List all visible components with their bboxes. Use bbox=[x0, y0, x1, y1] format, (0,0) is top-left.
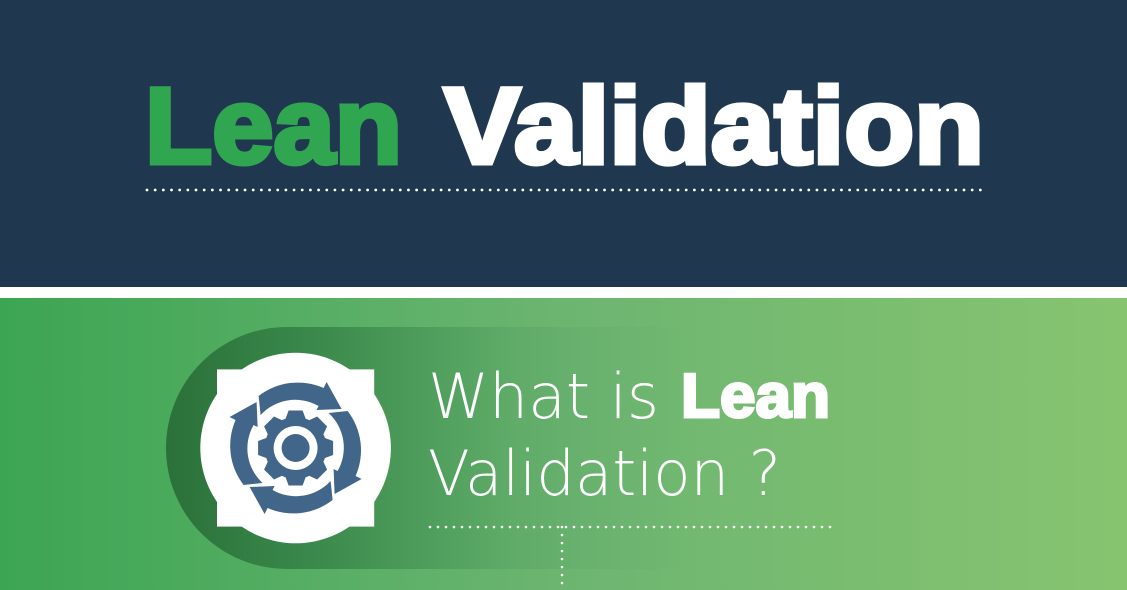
header band bbox=[0, 0, 1127, 287]
title: Validation bbox=[444, 65, 984, 186]
title: Lean bbox=[145, 65, 402, 186]
heading: What is Lean Validation ?: Validation ? bbox=[428, 437, 781, 510]
dotted connector bbox=[430, 527, 830, 590]
fading pill behind heading bbox=[166, 327, 700, 569]
heading: What is Lean Validation ?: Lean bbox=[681, 362, 830, 431]
heading: What is Lean Validation ?: What is bbox=[428, 360, 659, 433]
icon: gear with cycle arrows bbox=[200, 353, 391, 543]
green section background bbox=[0, 298, 1127, 590]
heading: What is Lean Validation ? bbox=[428, 360, 830, 510]
title bbox=[145, 65, 984, 186]
